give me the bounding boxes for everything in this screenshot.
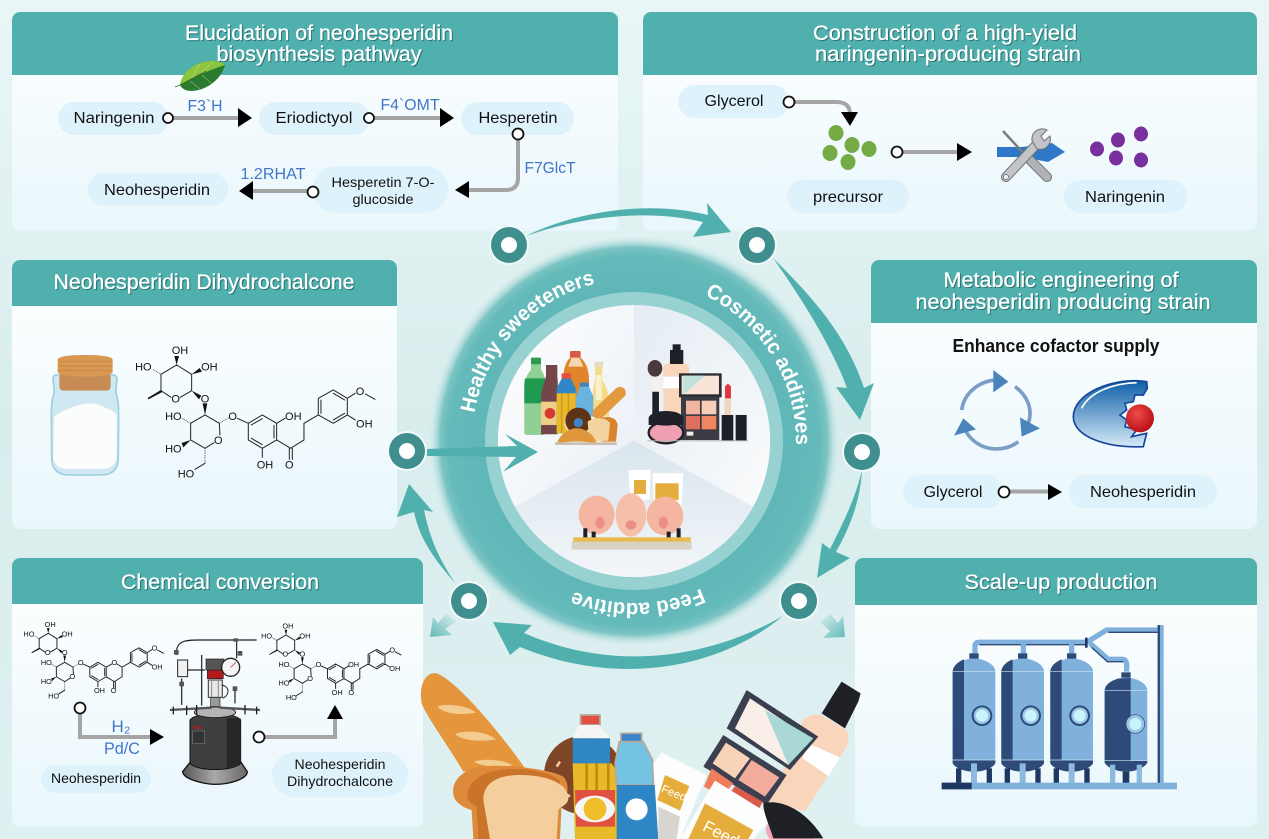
chemical structure: neohesperidin dihydrochalcone: OH (285, 411, 302, 423)
chemical structure: neohesperidin: HO (23, 630, 35, 639)
chemical structure: neohesperidin: O (45, 648, 51, 657)
chemical structure: neohesperidin dihydrochalcone product (261, 622, 401, 702)
chemical structure: neohesperidin dihydrochalcone product: HO (279, 679, 290, 688)
chemical structure: neohesperidin dihydrochalcone product: O (389, 645, 395, 654)
pill: precursor (787, 180, 909, 213)
icon: cosmetics (647, 344, 748, 443)
pill: Neohesperidin Dihydrochalcone (272, 752, 408, 797)
arrow: F3'H (163, 98, 252, 127)
chemical structure: neohesperidin dihydrochalcone: O (228, 411, 237, 423)
panel header (12, 12, 618, 75)
pill: Neohesperidin: Neohesperidin (104, 182, 210, 199)
pill: Hesperetin (461, 102, 574, 135)
heading: Neohesperidin Dihydrochalcone (54, 271, 354, 294)
panel header (855, 558, 1257, 605)
faded arrow: toward scale-up (820, 614, 845, 638)
table shadow (555, 442, 617, 445)
green label (524, 378, 545, 403)
pill: Hesperetin 7-O-glucoside: glucoside (352, 191, 414, 207)
heading: Elucidation of neohesperidin (185, 22, 453, 45)
pill: Hesperetin 7-O-glucoside: Hesperetin 7-O- (332, 174, 435, 190)
icon: pigs feeding (572, 470, 692, 550)
green bottle (524, 364, 546, 435)
chemical structure: neohesperidin: O (62, 648, 68, 657)
reagent: H2: H₂ (112, 717, 130, 736)
water bottle (576, 383, 593, 417)
icon: purple naringenin dots (1090, 126, 1148, 168)
panel: high-yield naringenin strain (643, 12, 1257, 231)
arrow: metabolic node to lower right node (817, 470, 862, 578)
chemical structure: neohesperidin dihydrochalcone product: HO (261, 631, 272, 640)
panel: scale-up production (855, 558, 1257, 827)
arrow: cosmetic node to metabolic node (773, 258, 874, 420)
chemical structure: neohesperidin: O (111, 686, 117, 695)
arrow: F3'H: F3`H (188, 98, 222, 115)
chemical structure: neohesperidin: OH (62, 630, 73, 639)
subheading: enhance cofactor supply: Enhance cofactor supply (952, 336, 1160, 356)
pill: Glycerol: Glycerol (704, 93, 764, 110)
chemical structure: neohesperidin dihydrochalcone product: OH (332, 688, 343, 697)
chemical structure: neohesperidin dihydrochalcone product: O (348, 688, 354, 697)
pill: Hesperetin 7-O-glucoside (313, 166, 448, 213)
chemical structure: neohesperidin dihydrochalcone: OH (356, 418, 373, 430)
chemical structure: neohesperidin dihydrochalcone: HO (165, 411, 182, 423)
chemical structure: neohesperidin: O (152, 644, 158, 653)
chemical structure: neohesperidin: OH (45, 620, 56, 629)
white centre with three sectors (498, 305, 770, 577)
pill: Neohesperidin (41, 765, 151, 793)
chemical structure: neohesperidin dihydrochalcone: OH (172, 345, 188, 357)
panel: elucidation of biosynthesis pathway (12, 12, 618, 231)
inner light ring (485, 292, 783, 590)
arrow: 1.2RHAT: 1.2RHAT (240, 166, 306, 183)
icon: cofactor cycle arrows (954, 370, 1040, 449)
heading: Scale-up production (964, 571, 1158, 594)
icon: pressure reactor (170, 638, 260, 784)
chemical structure: neohesperidin dihydrochalcone: HO (165, 443, 182, 455)
panel header (12, 558, 423, 604)
chemical structure: neohesperidin: HO (41, 677, 52, 686)
pill: Eriodictyol (259, 102, 370, 135)
arrow: F7GlcT (455, 128, 576, 198)
chemical structure: neohesperidin dihydrochalcone product: O (300, 650, 306, 659)
chemical structure: neohesperidin dihydrochalcone product: OH (282, 622, 293, 631)
pill: Naringenin: Naringenin (74, 110, 154, 127)
heading: Chemical conversion (121, 571, 319, 594)
arrow: glycerol to precursor (784, 96, 858, 126)
green cap (531, 358, 541, 364)
heading: neohesperidin producing strain (916, 291, 1210, 314)
icon: beverages and bakery (524, 351, 620, 445)
chemical structure: neohesperidin: OH (94, 686, 105, 695)
chemical structure: neohesperidin: HO (48, 691, 59, 700)
chemical structure: neohesperidin dihydrochalcone: O (171, 393, 180, 405)
pill: Neohesperidin: Neohesperidin (1090, 484, 1196, 501)
bread (588, 417, 618, 442)
pill: Glycerol: Glycerol (924, 484, 982, 501)
arrow: F7GlcT: F7GlcT (524, 160, 576, 177)
arrow: 1.2RHAT (239, 166, 318, 200)
pill: Glycerol (903, 475, 1003, 508)
panel: chemical conversion (12, 558, 423, 827)
baguette (598, 393, 620, 413)
pill: Neohesperidin (88, 173, 228, 206)
faded arrow: toward chemical conversion (430, 614, 456, 637)
chemical structure: neohesperidin: OH (152, 662, 163, 671)
chemical structure: neohesperidin dihydrochalcone product: O (316, 660, 322, 669)
pill: Glycerol (678, 85, 789, 118)
icon: enzyme with red substrate (1073, 381, 1154, 447)
arrow: lower right node to lower left node (493, 616, 783, 669)
panel header (12, 260, 397, 306)
panel header (643, 12, 1257, 75)
icon: jar of powder (51, 355, 119, 475)
chemical structure: neohesperidin dihydrochalcone: HO (135, 362, 152, 374)
chemical structure: neohesperidin dihydrochalcone product: OH (299, 631, 310, 640)
icon: blue arrow with crossed tools (997, 129, 1065, 180)
heading: Metabolic engineering of (944, 269, 1179, 292)
pill: Naringenin (1064, 180, 1187, 213)
chemical structure: neohesperidin dihydrochalcone: O (356, 386, 365, 398)
chemical structure: neohesperidin dihydrochalcone product: O (283, 650, 289, 659)
illustration: food, beverage, feed and cosmetics pile: Feed (660, 783, 688, 804)
pill: Neohesperidin Dihydrochalcone: Dihydrochalcone (287, 773, 393, 789)
chemical structure: neohesperidin dihydrochalcone (135, 345, 375, 480)
chemical structure: neohesperidin dihydrochalcone product: OH (348, 660, 359, 669)
chemical structure: neohesperidin dihydrochalcone product: OH (389, 664, 400, 673)
panel header (871, 260, 1257, 323)
chemical structure: neohesperidin dihydrochalcone: O (285, 459, 294, 471)
central ring (432, 238, 836, 644)
arrow: F4'OMT (364, 97, 454, 127)
chemical structure: neohesperidin: O (112, 658, 118, 667)
icon: green precursor dots (822, 125, 876, 170)
chemical structure: neohesperidin dihydrochalcone: O (214, 435, 223, 447)
blue and yellow bottle (557, 373, 576, 433)
chemical structure: neohesperidin dihydrochalcone: OH (257, 459, 273, 471)
pill: Neohesperidin Dihydrochalcone: Neohesperidin (294, 756, 386, 772)
ring label: Feed additive: Feed additive (572, 589, 706, 618)
orange bottle (563, 351, 589, 407)
pill: Neohesperidin: Neohesperidin (51, 770, 141, 786)
nodes: six ring connectors (387, 225, 882, 621)
panel: metabolic engineering (871, 260, 1257, 529)
pill: Naringenin: Naringenin (1085, 189, 1165, 206)
chemical structure: neohesperidin dihydrochalcone product: O (307, 674, 313, 683)
reagent: Pd/C: Pd/C (104, 739, 140, 758)
icon: leaf (175, 61, 225, 91)
chemical structure: neohesperidin: O (78, 658, 84, 667)
chemical structure: neohesperidin: HO (41, 658, 52, 667)
croissant (557, 428, 597, 444)
arrow: neohesperidin to reactor (74, 702, 164, 745)
heading: naringenin-producing strain (815, 43, 1081, 66)
heading: biosynthesis pathway (216, 43, 422, 66)
chemical structure: neohesperidin dihydrochalcone product: HO (279, 660, 290, 669)
brown bottle (541, 365, 558, 434)
chemical structure: neohesperidin dihydrochalcone: O (201, 393, 210, 405)
chemical structure: neohesperidin: O (70, 672, 76, 681)
arrow: pathway to cosmetic node (526, 203, 731, 237)
arrow: F4'OMT: F4`OMT (380, 97, 440, 114)
chemical structure: neohesperidin dihydrochalcone: HO (178, 468, 195, 480)
ring label: Cosmetic additives: Cosmetic additives (708, 284, 808, 444)
chemical structure: neohesperidin dihydrochalcone product: HO (286, 693, 297, 702)
arrow: lower left node to left node (397, 484, 455, 583)
arrow: left node into centre (427, 434, 538, 472)
illustration: food, beverage, feed and cosmetics pile (421, 673, 861, 839)
arrow: glycerol to neohesperidin (998, 484, 1062, 500)
chemical structure: neohesperidin dihydrochalcone: OH (201, 362, 218, 374)
arrow: precursor to tools (892, 143, 972, 161)
icon: fermentation tanks (942, 625, 1177, 789)
pill: Neohesperidin (1069, 475, 1217, 508)
chemical structure: neohesperidin (23, 620, 163, 700)
panel: neohesperidin dihydrochalcone (12, 260, 397, 529)
pill: Naringenin (58, 102, 169, 135)
ring label: Healthy sweeteners: Healthy sweeteners (460, 274, 594, 412)
pill: Hesperetin: Hesperetin (478, 110, 558, 127)
heading: Construction of a high-yield (813, 22, 1077, 45)
pill: Eriodictyol: Eriodictyol (276, 110, 352, 127)
pill: precursor: precursor (813, 189, 884, 206)
pale yellow bottle (592, 362, 609, 417)
arrow: reactor to product (254, 705, 343, 742)
donut (564, 408, 592, 436)
